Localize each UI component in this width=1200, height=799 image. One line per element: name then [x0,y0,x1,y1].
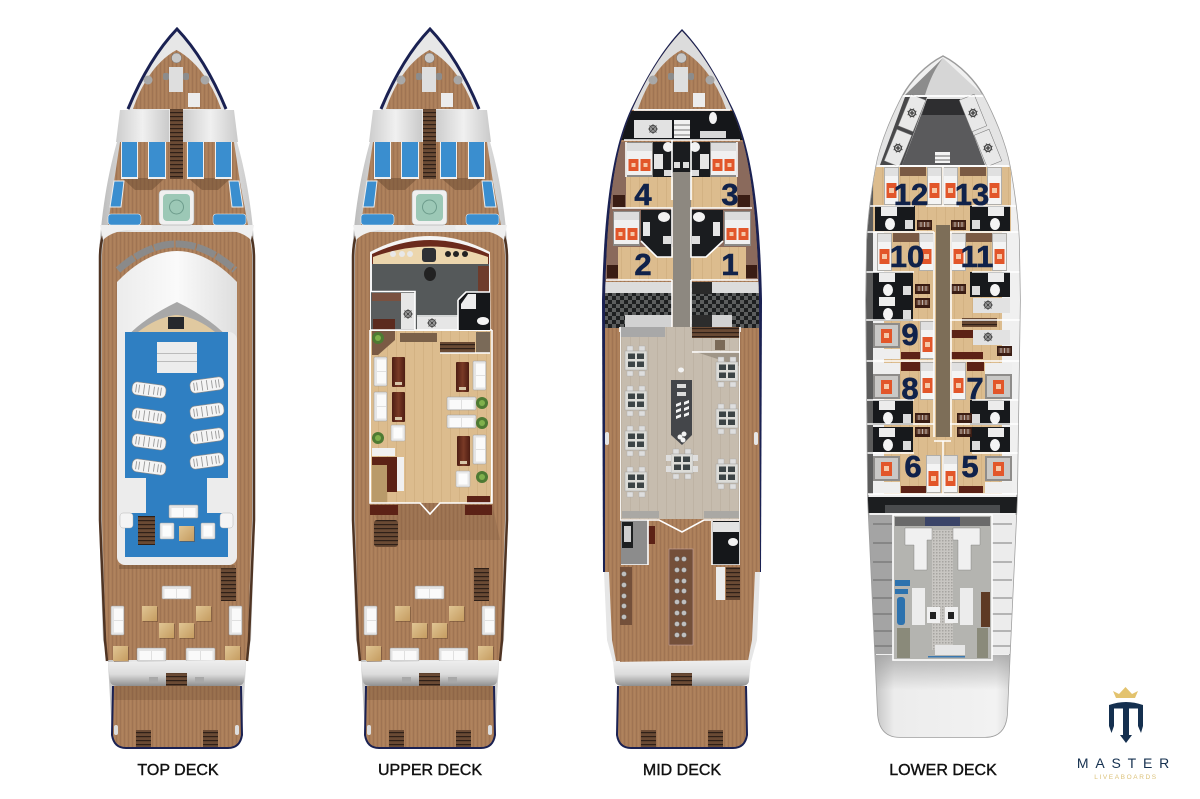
sun deck roof [117,251,237,345]
logo: master liveaboards: MASTER [1077,755,1176,771]
forward crew rooms [622,111,742,140]
label: top deck: TOP DECK [137,762,219,779]
bridge bathroom [458,292,490,330]
bridge floor [372,264,489,330]
stern band and swim platform [613,660,751,748]
cabin numbers 5-13: 12 [894,177,928,212]
central corridor [936,225,950,437]
beds: cabins 9, 8 and 7 [873,321,1012,400]
shadow behind saloon [370,503,500,540]
roof windows arc [118,244,235,270]
cabin numbers 5-13: 7 [966,371,984,406]
bridge console [372,240,489,264]
cabin numbers 5-13: 6 [904,449,922,484]
cabin numbers 5-13: 13 [955,177,989,212]
stairs and bar bench [620,549,740,645]
cabin numbers 1-4: 3 [721,177,739,212]
helm console [138,315,215,332]
aft sun deck furniture [120,478,233,545]
aft galley and bathroom [621,520,648,565]
ship: mid deck [600,29,770,748]
dining saloon floor [620,327,740,519]
ship: upper deck [352,29,508,748]
walls [860,96,1030,494]
saloon furniture [372,357,490,503]
hull [602,29,762,572]
cabin numbers 5-13: 9 [901,317,919,352]
bunks: cabins 12 and 13 [884,167,1002,205]
cabin numbers 1-4 [634,177,739,282]
logo: master liveaboards: LIVEABOARDS [1094,774,1158,781]
cabin numbers 5-13: 10 [890,239,924,274]
bunks: cabins 10 and 11 [877,233,1007,271]
aft wood deck [609,572,755,661]
cabin numbers 5-13: 5 [961,449,979,484]
fuel tank bulkhead [868,497,1018,513]
bathrooms row one [875,206,915,231]
buffet table [671,380,692,445]
cabin numbers 5-13 [890,177,993,484]
label: lower deck: LOWER DECK [889,762,997,779]
sun deck blue floor [125,332,228,557]
cabin numbers 5-13: 11 [961,239,993,274]
engine room [893,515,992,660]
bridge and aft saloon shell [370,236,492,503]
cabin numbers 1-4: 2 [634,247,652,282]
saloon floor [371,331,491,503]
cabin numbers 5-13: 8 [901,371,919,406]
galley [605,288,672,328]
cabin numbers 1-4: 4 [634,177,652,212]
ship: lower deck [860,56,1032,740]
cabin bathrooms [653,142,673,177]
dining tables [625,346,647,376]
crew berths and stairs [951,298,1012,359]
label: upper deck: UPPER DECK [378,762,482,779]
cabin deck floors [860,167,1030,494]
beds [626,142,653,177]
beds: cabins 6 and 5 [873,455,1012,493]
bow compartment [925,58,983,95]
sun loungers [131,376,225,476]
interior white walls [606,110,758,565]
curved stairs to aft deck [374,520,398,547]
forward crew bunks [884,94,1002,167]
bathrooms aft pair [873,400,913,425]
bathrooms row two [873,272,913,297]
engine room side tanks [870,515,892,654]
guest cabins floors and side strips [600,142,770,280]
logo: master liveaboards [1077,687,1176,781]
captain cabin [370,292,492,330]
stern void [875,655,1010,737]
cabin numbers 1-4: 1 [721,247,739,282]
ship: top deck [99,29,255,748]
corridor [673,172,691,332]
label: mid deck: MID DECK [643,762,721,779]
